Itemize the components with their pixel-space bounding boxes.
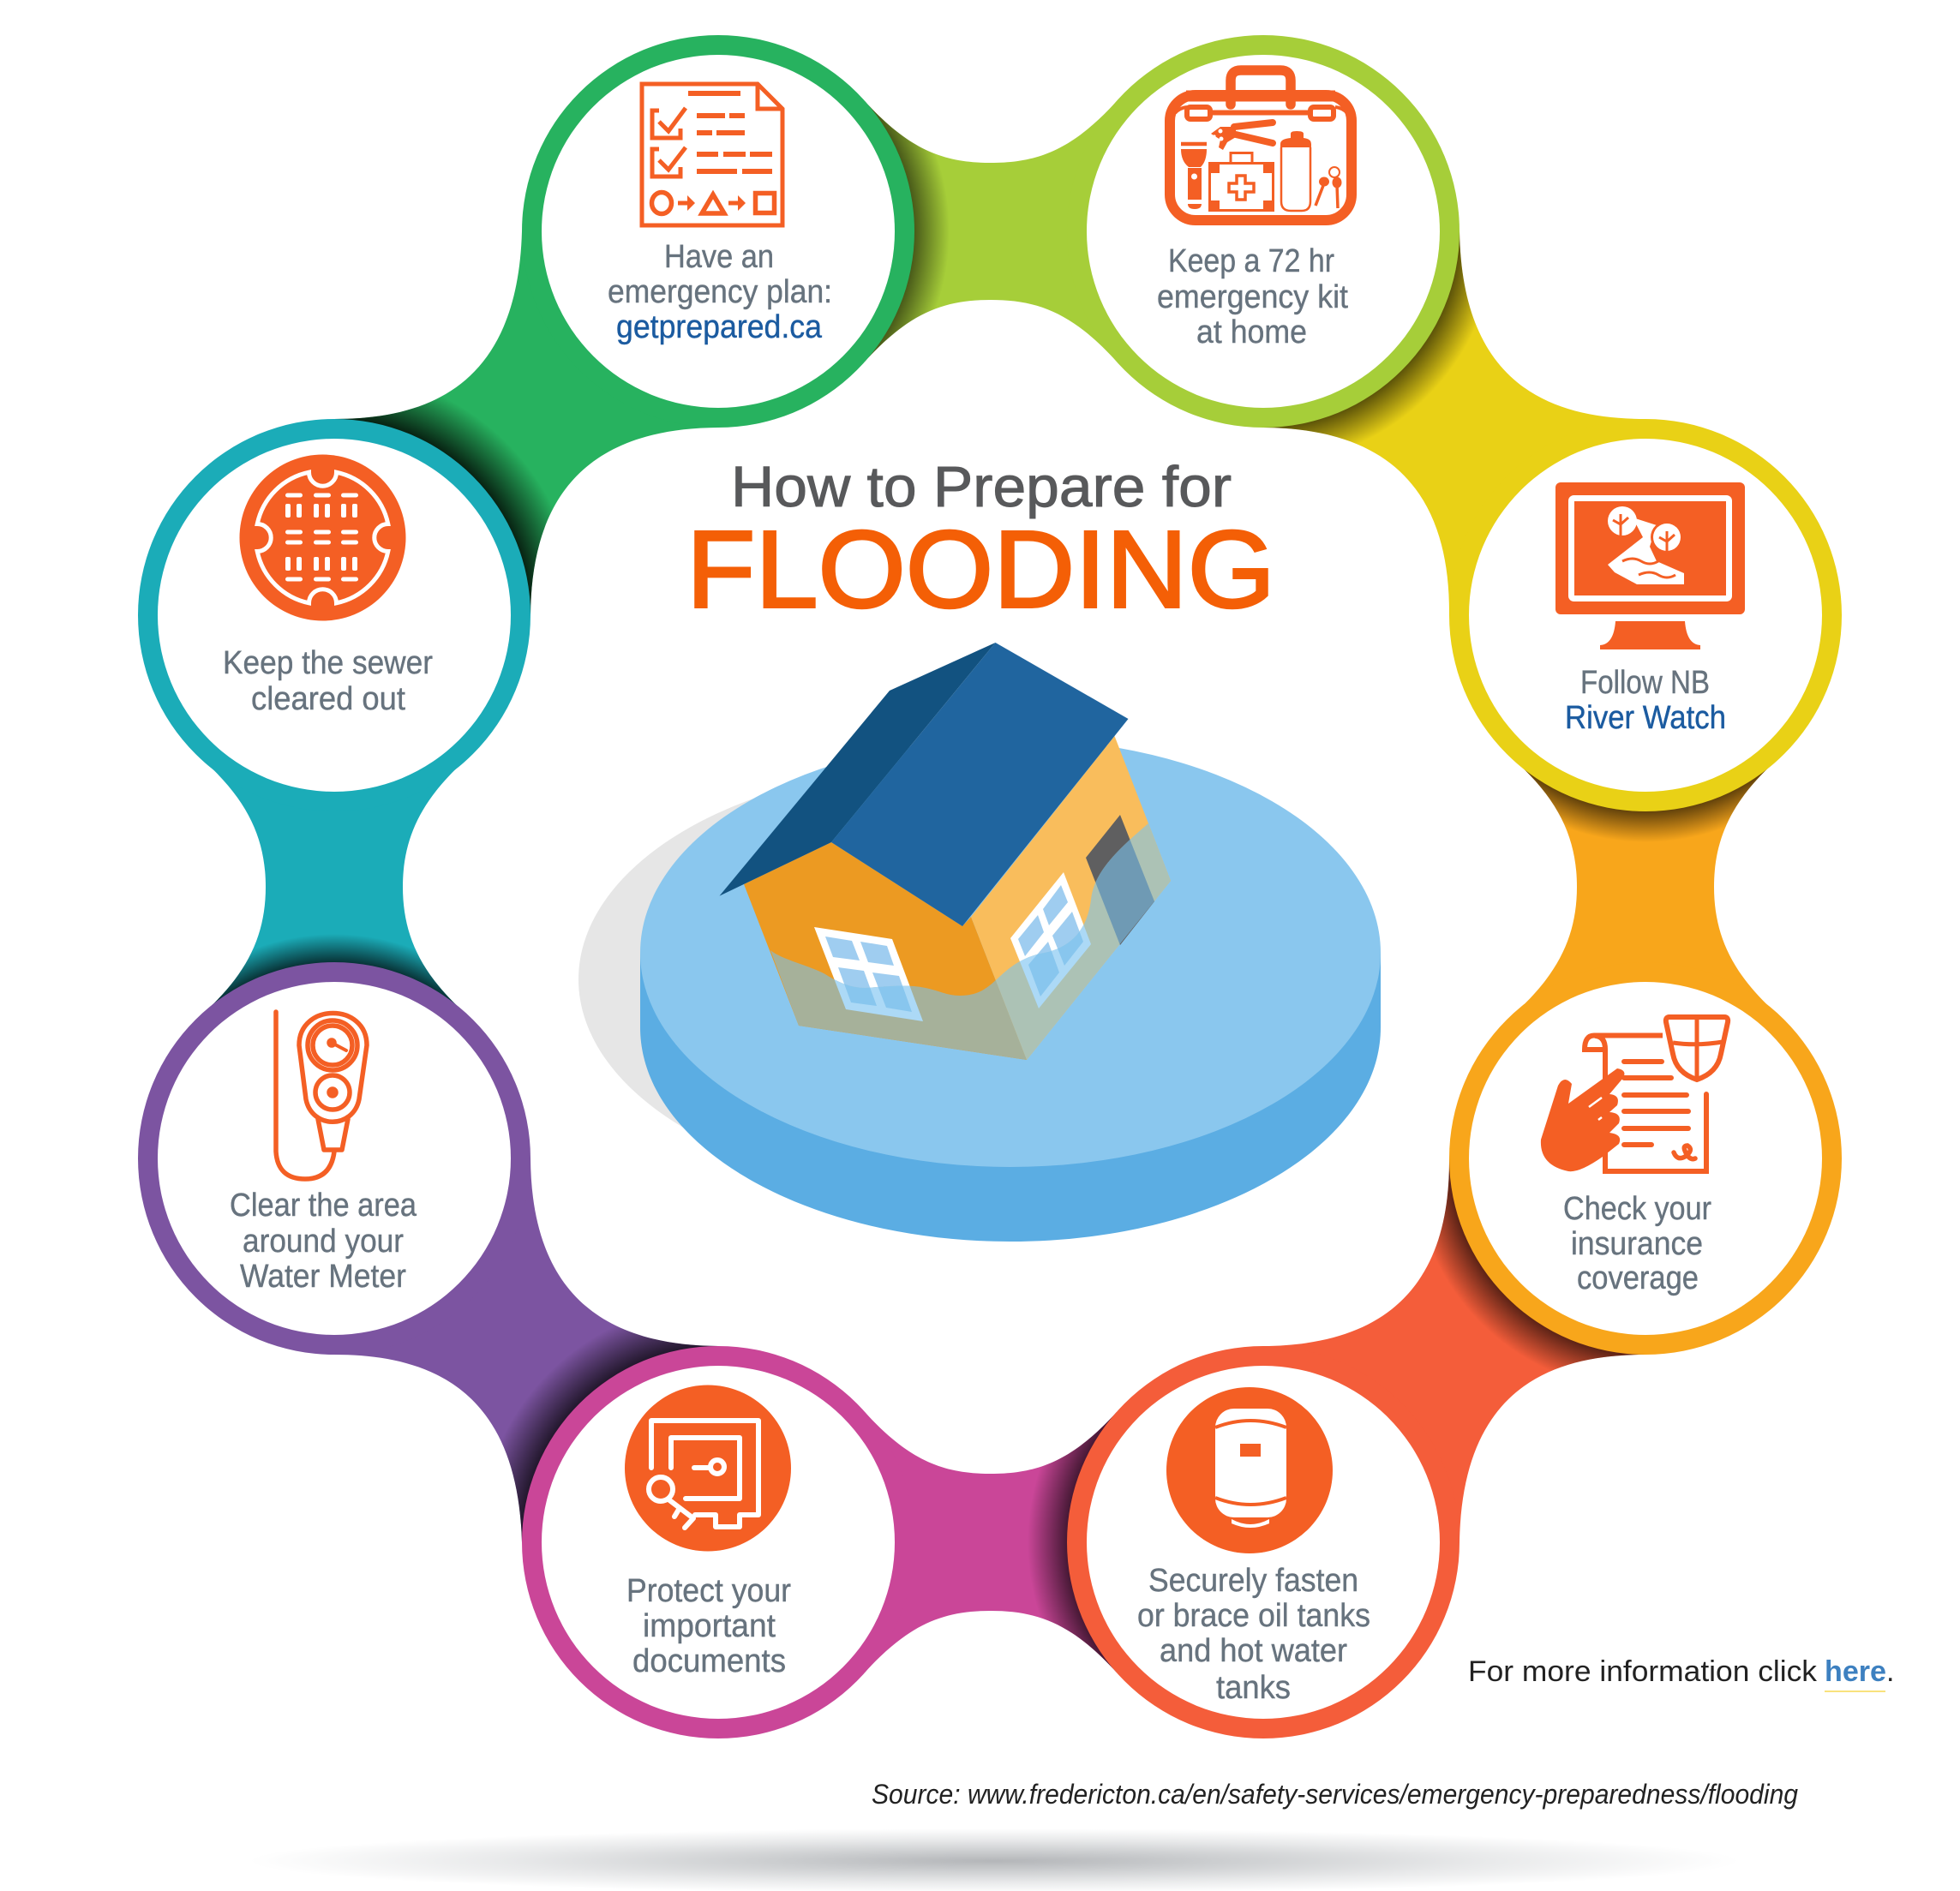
label: keep a 72 hr emergency kit [1157,243,1348,350]
connector: green curve between sewer and plan [334,231,718,615]
label: keep the sewer cleared out: cleared out [251,681,405,717]
label: keep a 72 hr emergency kit: at home [1196,314,1307,350]
front window [814,927,923,1021]
panel: sewer [138,419,530,811]
label: check your insurance coverage: insurance [1571,1226,1703,1262]
disc shadow [578,765,1333,1194]
label: have an emergency plan [608,239,832,345]
link text: more information: For more information click [1468,1655,1818,1688]
connector: red curve between insurance and tanks [1263,1158,1645,1542]
label: securely fasten tanks [1137,1563,1370,1706]
panel: water meter [138,962,530,1355]
label: follow NB river watch: River Watch [1565,700,1726,736]
panel: insurance [1449,962,1842,1355]
link text: more information [1468,1655,1894,1692]
connector: amber neck between river watch and insurance [1515,761,1776,1013]
icon: water meter [276,1012,367,1179]
icon: hot water tank [1166,1387,1333,1553]
flooded lower part of house [770,823,1171,1060]
icon: emergency kit suitcase [1170,70,1352,220]
panel: river watch [1449,419,1842,811]
connector: lime neck between plan and kit [865,101,1117,362]
panel: important documents [522,1346,914,1738]
title: FLOODING [686,509,1275,631]
label: securely fasten tanks: Securely fasten [1148,1563,1358,1599]
label: keep a 72 hr emergency kit: Keep a 72 hr [1168,243,1334,279]
label: keep the sewer cleared out: Keep the sewer [223,645,433,681]
side window [1010,872,1091,1008]
panel: oil and water tanks [1067,1346,1460,1738]
label: clear the area around your water meter: Water Meter [240,1259,406,1295]
label: protect your important documents [626,1573,791,1679]
label: protect your important documents: documents [632,1643,786,1679]
label: clear the area around your water meter: Clear the area [230,1188,417,1224]
label: clear the area around your water meter [230,1188,417,1295]
house walls above water [744,736,1171,1060]
label: clear the area around your water meter: around your [243,1224,404,1260]
panel: emergency plan [522,35,914,428]
house roof [720,643,1128,926]
label: securely fasten tanks: and hot water [1160,1633,1347,1669]
icon: insurance document with hand and shield [1541,1017,1728,1171]
icon: monitor with river map [1555,482,1745,649]
link text: more information: . [1886,1655,1894,1688]
icon: manhole cover [240,454,406,620]
icon: checklist document [642,84,782,225]
label: have an emergency plan: Have an [664,239,774,275]
link text: more information: here [1825,1655,1886,1688]
label: have an emergency plan: getprepared.ca [616,309,823,345]
connector: purple curve between documents and water meter [334,1158,718,1542]
label: check your insurance coverage: Check your [1563,1191,1711,1227]
connector: yellow curve between kit and river watch [1263,231,1645,615]
connector: magenta neck between tanks and documents [865,1412,1117,1673]
panel: emergency kit [1067,35,1460,428]
label: keep the sewer cleared out [223,645,433,717]
label: check your insurance coverage [1563,1191,1711,1296]
label: follow NB river watch: Follow NB [1580,665,1710,701]
label: securely fasten tanks: tanks [1216,1670,1291,1706]
title: How to Prepare for [731,455,1232,519]
label: have an emergency plan: emergency plan: [608,274,832,310]
illustration: flooded house on water disc [578,643,1381,1242]
label: check your insurance coverage: coverage [1577,1260,1699,1296]
label: follow NB river watch [1565,665,1726,736]
title [686,455,1275,631]
label: securely fasten tanks: or brace oil tanks [1137,1598,1370,1634]
label: protect your important documents: Protect your [626,1573,791,1609]
source line: Source: www.fredericton.ca/en/safety-services/emergency-preparedness/flooding [872,1779,1798,1810]
water disc [640,739,1381,1242]
floor shadow [249,1828,1740,1891]
connector: teal neck between water meter and sewer [204,761,465,1013]
label: keep a 72 hr emergency kit: emergency kit [1157,279,1348,315]
label: protect your important documents: important [643,1608,776,1644]
icon: safe and key [625,1385,791,1551]
